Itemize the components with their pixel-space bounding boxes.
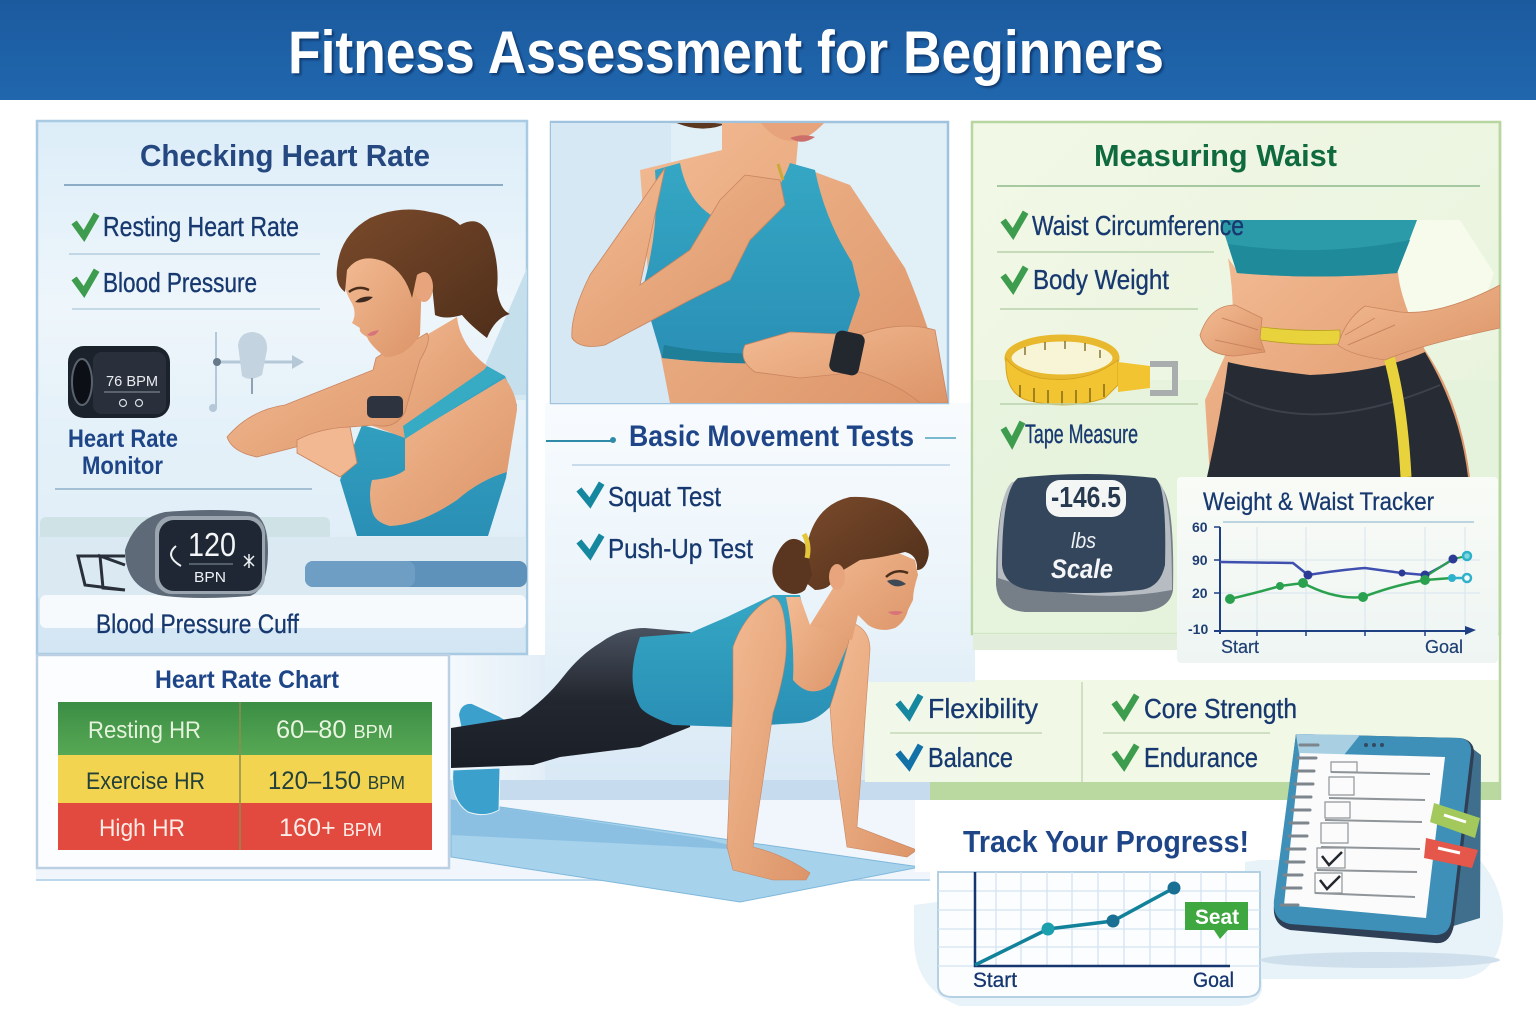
label: heart rate monitor: Heart Rate — [68, 425, 178, 453]
chart title: Heart Rate Chart — [155, 666, 340, 694]
torso — [632, 595, 852, 727]
check item: balance: Balance — [928, 742, 1013, 773]
label: heart rate monitor: Monitor — [82, 452, 163, 480]
check item: balance — [900, 742, 1013, 773]
progress chart — [938, 872, 1260, 997]
check item: endurance: Endurance — [1144, 742, 1258, 773]
check item: flexibility: Flexibility — [928, 693, 1038, 724]
checklist: squat and push-up — [581, 481, 753, 564]
head — [772, 497, 929, 640]
exercise mat — [451, 800, 920, 902]
legs — [451, 628, 700, 768]
heading: measuring waist: Measuring Waist — [1094, 138, 1337, 173]
check item: push-up test: Push-Up Test — [608, 533, 753, 564]
chest and arms — [727, 597, 917, 880]
row: high: High HR — [99, 815, 185, 842]
row: resting: 60–80 BPM — [276, 716, 393, 744]
card: heart rate chart — [37, 655, 449, 868]
icon: blood pressure cuff — [78, 510, 268, 598]
page background: centre scene — [36, 403, 975, 881]
line chart: 60 — [1192, 519, 1208, 535]
heading: checking heart rate: Checking Heart Rate — [140, 138, 430, 173]
woman checking pulse — [227, 210, 517, 536]
line chart — [1188, 519, 1480, 657]
line chart: 20 — [1192, 585, 1208, 601]
card: weight and waist tracker — [1177, 477, 1498, 663]
check item: resting heart rate: Resting Heart Rate — [103, 211, 299, 242]
check item: tape measure — [1005, 419, 1138, 449]
check item: squat test: Squat Test — [608, 481, 721, 512]
check item: waist circumference: Waist Circumference — [1032, 210, 1244, 241]
heading: basic movement tests: Basic Movement Tests — [629, 420, 914, 453]
row: resting — [58, 702, 432, 755]
icon: scale — [996, 474, 1173, 612]
header banner — [0, 0, 1536, 100]
icon: scale: -146.5 — [1051, 482, 1121, 514]
line chart: Start — [1221, 637, 1259, 657]
icon: blood pressure cuff: 120 — [188, 526, 236, 563]
icon: clipboard notebook — [1260, 734, 1500, 968]
check item: core strength: Core Strength — [1144, 693, 1297, 724]
head — [337, 210, 510, 357]
heading: basic movement tests — [546, 420, 956, 465]
row: high — [58, 803, 432, 850]
check item: endurance — [1116, 742, 1258, 773]
label: blood pressure cuff: Blood Pressure Cuff — [96, 609, 299, 639]
row: exercise — [58, 755, 432, 803]
panel: measuring waist — [865, 122, 1500, 800]
row: exercise: 120–150 BPM — [268, 767, 405, 795]
woman doing push-up on mat — [451, 497, 929, 902]
icon: heart rate monitor — [68, 346, 170, 418]
icon: scale: Scale — [1051, 554, 1113, 584]
panel: checking heart rate — [37, 121, 527, 654]
row: exercise: Exercise HR — [86, 768, 205, 795]
lower checklist: flexibility, balance, core, endurance — [890, 682, 1297, 782]
table surface — [38, 537, 527, 628]
track your progress section — [914, 734, 1503, 1006]
title: Fitness Assessment for Beginners — [288, 19, 1164, 86]
icon: tape measure — [1006, 338, 1175, 405]
progress chart: Goal — [1193, 969, 1234, 992]
waist figure — [1200, 220, 1500, 477]
line chart: Goal — [1425, 637, 1463, 657]
check item: body weight: Body Weight — [1033, 264, 1169, 295]
label: heart rate monitor — [68, 425, 178, 480]
icon: heart rate monitor: 76 BPM — [106, 373, 158, 390]
progress chart: Start — [973, 969, 1017, 992]
line chart: 90 — [1192, 552, 1208, 568]
row: high: 160+ BPM — [279, 814, 382, 842]
heading: track your progress: Track Your Progress! — [963, 824, 1249, 859]
icon: scale: lbs — [1071, 528, 1096, 553]
line chart: -10 — [1188, 621, 1208, 637]
panel: basic movement tests photo — [551, 118, 948, 403]
icon: pulse diagram — [209, 332, 304, 412]
check item: tape measure: Tape Measure — [1025, 419, 1138, 449]
check item: blood pressure: Blood Pressure — [103, 267, 257, 298]
row: resting: Resting HR — [88, 717, 201, 744]
progress chart: Seat — [1195, 906, 1239, 929]
icon: blood pressure cuff: BPN — [194, 569, 226, 586]
shoes — [453, 703, 515, 815]
tracker title: Weight & Waist Tracker — [1203, 488, 1434, 516]
